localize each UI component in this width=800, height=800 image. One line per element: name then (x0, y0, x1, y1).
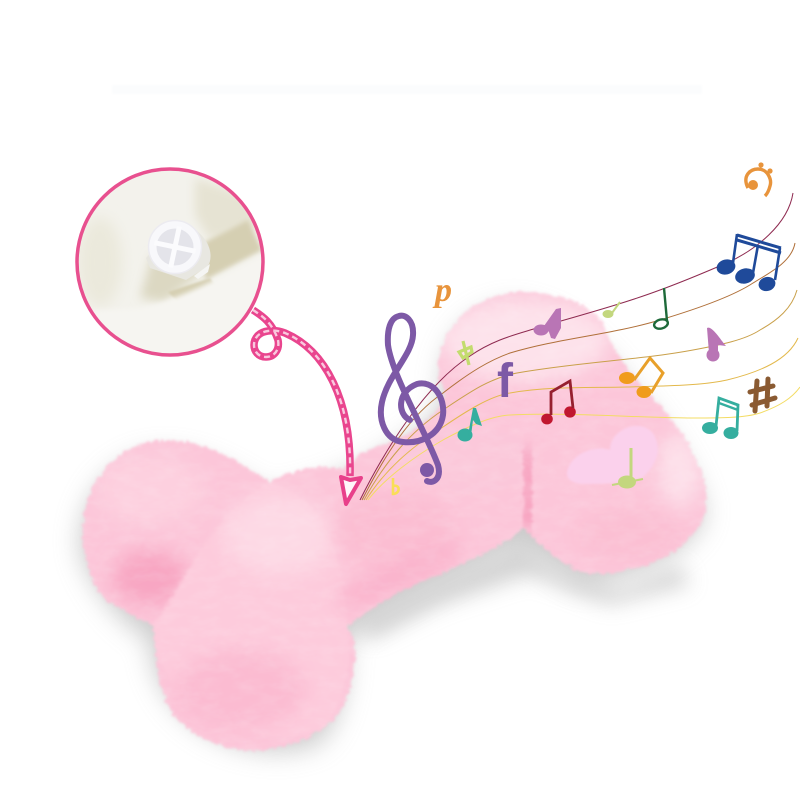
teal single note (458, 408, 482, 442)
mauve note near lobe (534, 308, 561, 339)
inset pink ring (77, 169, 263, 355)
bone toy drop shadow (80, 306, 704, 751)
lime natural sign (459, 341, 472, 365)
teal beamed notes (702, 398, 738, 439)
mauve note on the right (706, 328, 726, 362)
music staff lines (360, 193, 800, 500)
yellow flat sign (393, 478, 399, 494)
green half note (653, 288, 669, 330)
infographic canvas (68, 162, 800, 764)
sharp sign (750, 379, 775, 411)
dynamics letter f: f (497, 355, 514, 408)
orange beamed notes (619, 358, 663, 398)
plush pink bone toy (80, 290, 715, 755)
dynamics letter p: p (432, 272, 452, 309)
stitched looping arrow (253, 310, 361, 504)
front lobe overlapping rear lobe (164, 564, 199, 616)
red beamed notes (541, 381, 576, 424)
fur highlight texture (137, 484, 532, 577)
arrow head (341, 477, 361, 504)
embroidered heart patch (567, 426, 658, 484)
blue beamed notes (715, 234, 781, 293)
faint erased caption band (112, 85, 702, 94)
bass clef (746, 162, 773, 196)
shadow under shaft and right lobe (360, 545, 690, 640)
magnified valve inset (75, 167, 265, 357)
bone body with fur shading (83, 292, 707, 750)
lime note on heart (612, 448, 643, 488)
treble clef (381, 316, 443, 482)
small lime note (602, 302, 620, 318)
inset fabric background (78, 170, 261, 353)
valve part (146, 220, 211, 280)
